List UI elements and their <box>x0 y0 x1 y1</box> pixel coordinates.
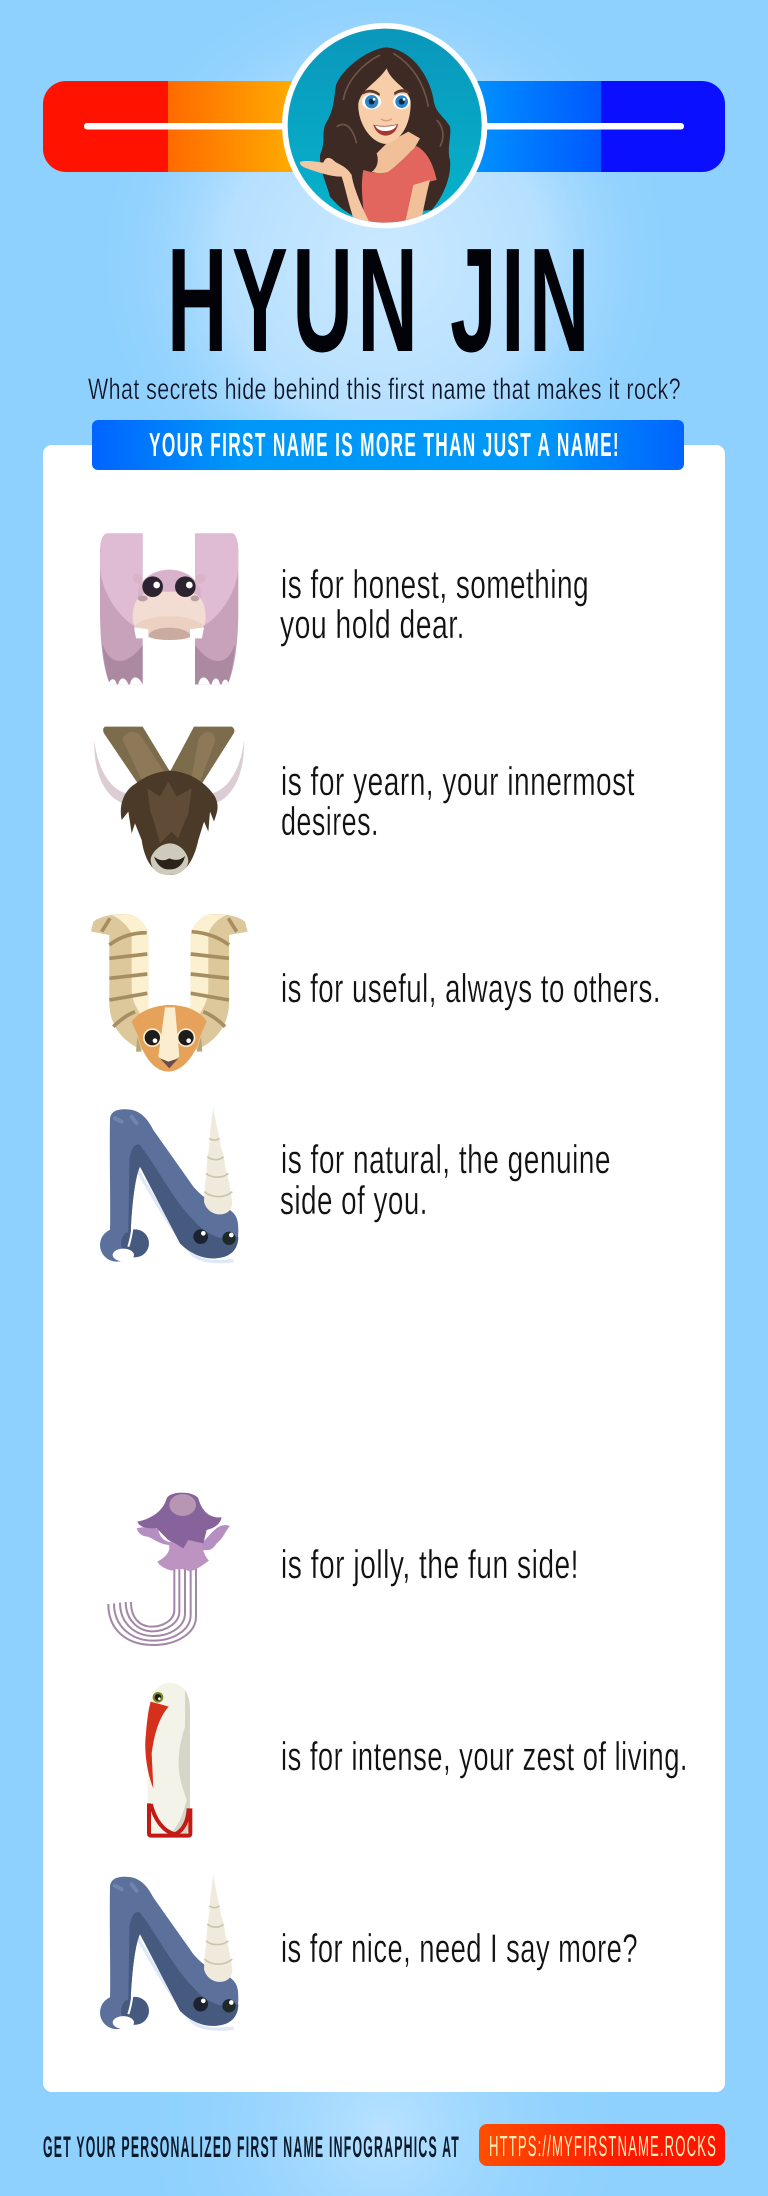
text: H <box>280 563 589 647</box>
letter Y: yak <box>94 727 244 875</box>
banner <box>92 420 684 470</box>
letter H: hippo <box>100 533 238 684</box>
letter J: jellyfish <box>108 1493 230 1645</box>
footer link button <box>479 2124 725 2166</box>
text: J: is for jolly, the fun side! <box>281 1543 579 1587</box>
text: N natural <box>280 1138 611 1223</box>
text: H: is for honest, something <box>281 563 589 607</box>
text: Y: desires. <box>281 800 379 844</box>
text: N natural: side of you. <box>280 1179 428 1223</box>
avatar: smiling woman in circle <box>282 23 487 228</box>
letter U: ram <box>91 914 248 1072</box>
panel: white card <box>43 445 725 2092</box>
text: H: you hold dear. <box>280 603 465 647</box>
letter N: narwhal <box>100 1107 238 1262</box>
text: Y <box>281 760 635 844</box>
letter I: stork <box>145 1683 190 1837</box>
letter N: narwhal second <box>100 1874 238 2029</box>
header ribbon bar <box>43 81 725 172</box>
text: N natural: is for natural, the genuine <box>281 1138 611 1182</box>
